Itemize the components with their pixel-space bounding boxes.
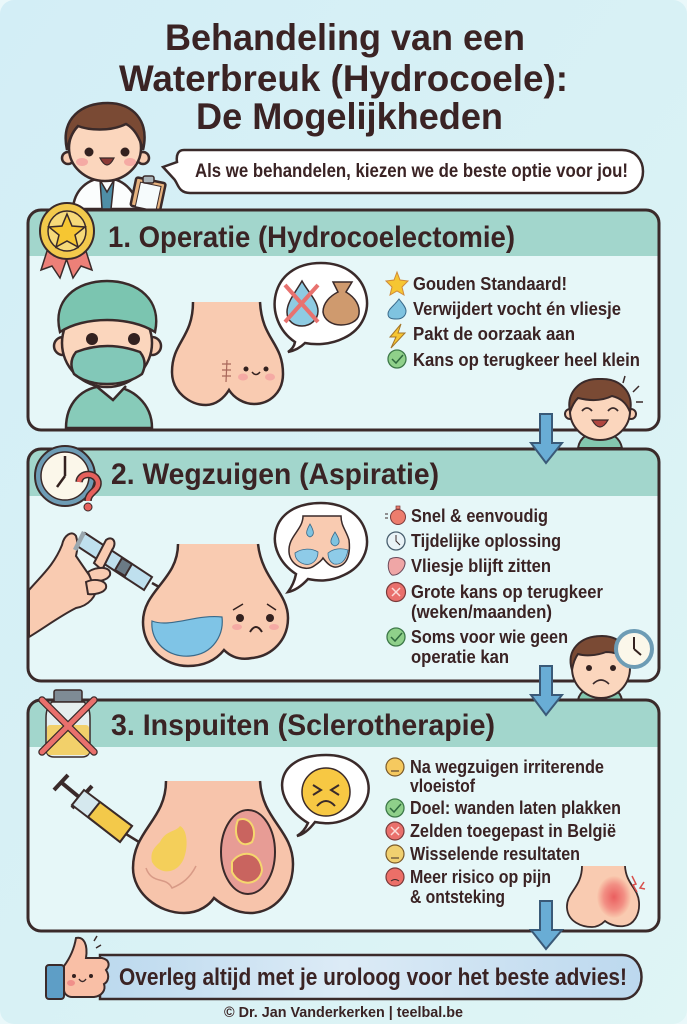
icon: green check	[388, 350, 406, 368]
title: De Mogelijkheden	[196, 96, 503, 137]
illustration: scrotum with injected fluid	[133, 781, 293, 913]
bullet list: wegzuigen: Soms voor wie geen	[411, 627, 568, 647]
speech bubble: doctor	[163, 150, 643, 193]
speech bubble: doctor: Als we behandelen, kiezen we de beste optie voor jou!	[195, 160, 628, 182]
icon: drops	[388, 299, 406, 319]
icon: lightning	[390, 324, 405, 348]
icon: happy boy	[565, 376, 643, 448]
bullet list: operatie: Verwijdert vocht én vliesje	[413, 299, 621, 319]
icon: stopwatch	[385, 506, 406, 524]
bullet list: operatie: Gouden Standaard!	[413, 274, 567, 294]
icon: surgeon	[54, 281, 161, 428]
icon: neutral face	[386, 845, 404, 863]
icon: angry face	[386, 868, 404, 886]
bullet list: wegzuigen: Grote kans op terugkeer	[411, 582, 603, 602]
bullet list: inspuiten: Doel: wanden laten plakken	[410, 798, 621, 818]
icon: red cross	[386, 822, 404, 840]
bullet list: inspuiten: vloeistof	[410, 776, 476, 796]
bullet list: wegzuigen: (weken/maanden)	[411, 602, 552, 622]
bullet list: inspuiten: Wisselende resultaten	[410, 844, 580, 864]
icon: green check	[387, 628, 405, 646]
illustration: inflamed scrotum	[567, 866, 645, 927]
icon: red cross	[386, 582, 406, 602]
panel: operatie	[28, 203, 659, 430]
bullet list: operatie: Pakt de oorzaak aan	[413, 324, 575, 344]
arrow: operatie to wegzuigen	[531, 414, 562, 463]
bullet list: wegzuigen: operatie kan	[411, 647, 509, 667]
title: Waterbreuk (Hydrocoele):	[119, 58, 568, 99]
illustration: scrotum with scar	[172, 302, 283, 405]
illustration: scrotum with fluid	[143, 544, 288, 666]
footer: © Dr. Jan Vanderkerken | teelbal.be	[224, 1004, 463, 1021]
heading: wegzuigen: 2. Wegzuigen (Aspiratie)	[111, 458, 439, 491]
icon: worried boy with clock	[571, 631, 652, 700]
heading: inspuiten: 3. Inspuiten (Sclerotherapie)	[111, 709, 495, 742]
icon: neutral face	[386, 758, 404, 776]
icon: gold medal	[40, 203, 94, 278]
icon: star	[386, 272, 408, 295]
bullet list: inspuiten	[386, 757, 621, 907]
icon: clock with question mark	[35, 446, 98, 511]
speech bubble: pain face	[282, 755, 369, 836]
callout: advice banner: Overleg altijd met je uroloog voor het beste advies!	[119, 964, 627, 991]
bullet list: inspuiten: Zelden toegepast in België	[410, 821, 616, 841]
callout: advice banner	[100, 955, 642, 999]
speech bubble: fluid returns	[275, 503, 367, 592]
panel: wegzuigen	[28, 446, 659, 681]
bullet list: wegzuigen: Vliesje blijft zitten	[411, 556, 551, 576]
bullet list: inspuiten: Na wegzuigen irriterende	[410, 757, 604, 777]
icon: thumbs up	[46, 936, 109, 999]
icon: crossed-out bottle	[42, 690, 94, 757]
bullet list: inspuiten: Meer risico op pijn	[410, 867, 551, 887]
bullet list: inspuiten: & ontsteking	[410, 887, 505, 907]
bullet list: wegzuigen: Tijdelijke oplossing	[411, 531, 561, 551]
icon: clock	[387, 532, 405, 550]
title: Behandeling van een	[165, 17, 525, 58]
speech bubble: drop and sac	[275, 263, 367, 352]
illustration: hand with syringe	[29, 532, 188, 637]
heading: operatie: 1. Operatie (Hydrocoelectomie)	[108, 221, 515, 254]
icon: membrane	[388, 558, 405, 575]
icon: doctor mascot	[62, 103, 166, 212]
bullet list: wegzuigen: Snel & eenvoudig	[411, 506, 548, 526]
illustration: syringe with yellow fluid	[54, 775, 160, 855]
arrow: inspuiten to advies	[531, 901, 562, 949]
bullet list: operatie	[386, 272, 640, 370]
icon: green check	[386, 799, 404, 817]
bullet list: wegzuigen	[385, 506, 603, 667]
panel: inspuiten	[28, 690, 659, 931]
title	[119, 17, 568, 137]
arrow: wegzuigen to inspuiten	[531, 666, 562, 715]
bullet list: operatie: Kans op terugkeer heel klein	[413, 350, 640, 370]
